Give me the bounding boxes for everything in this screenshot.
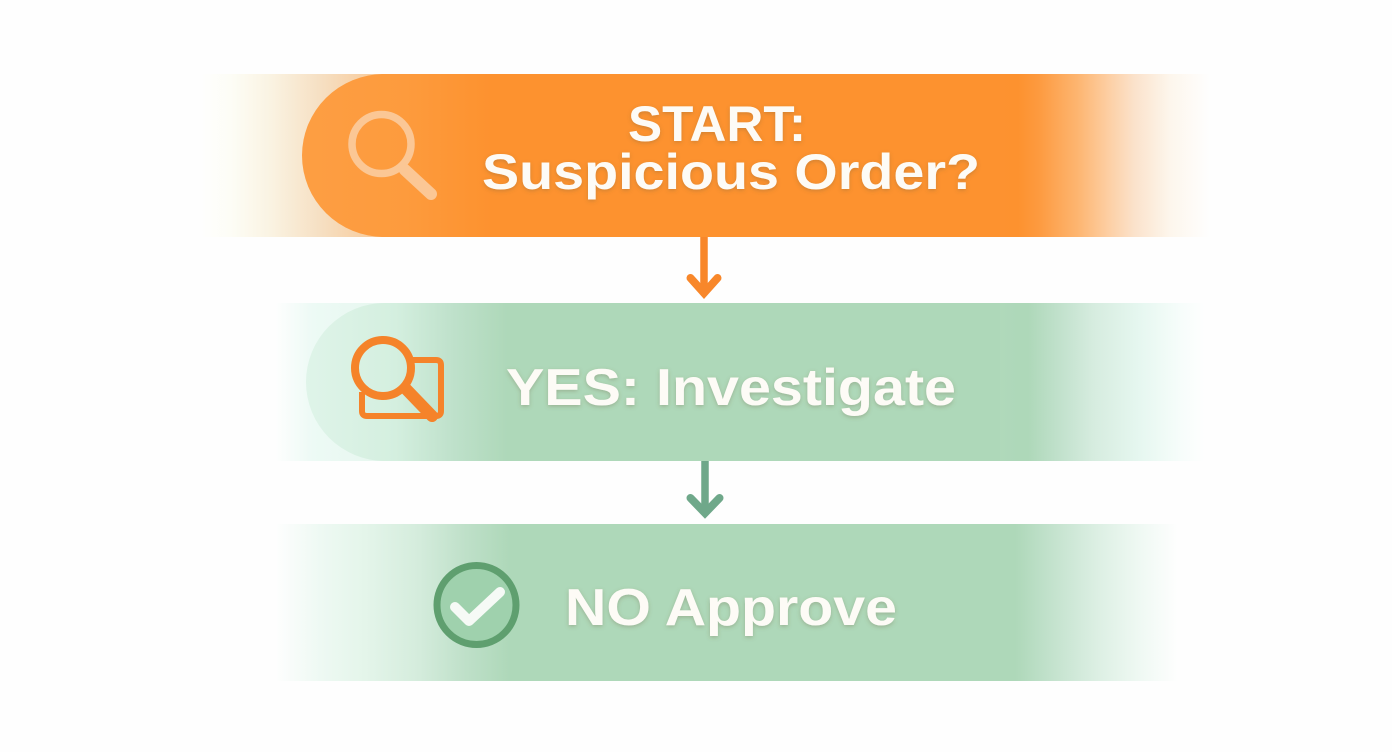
label: yes investigate: YES: Investigate <box>506 359 956 417</box>
icon: magnifying glass <box>352 114 431 194</box>
icon: magnifier over document <box>355 340 441 416</box>
icon: check circle <box>437 566 516 644</box>
arrow: start to yes <box>690 237 718 293</box>
panel: no approve <box>275 524 1178 681</box>
panel: yes investigate <box>275 303 1205 461</box>
heading: suspicious order: Suspicious Order? <box>482 144 980 200</box>
label: no approve: NO Approve <box>565 579 897 637</box>
panel: start suspicious order <box>200 74 1210 237</box>
arrow: yes to no <box>690 461 720 513</box>
heading: start: START: <box>628 96 806 152</box>
